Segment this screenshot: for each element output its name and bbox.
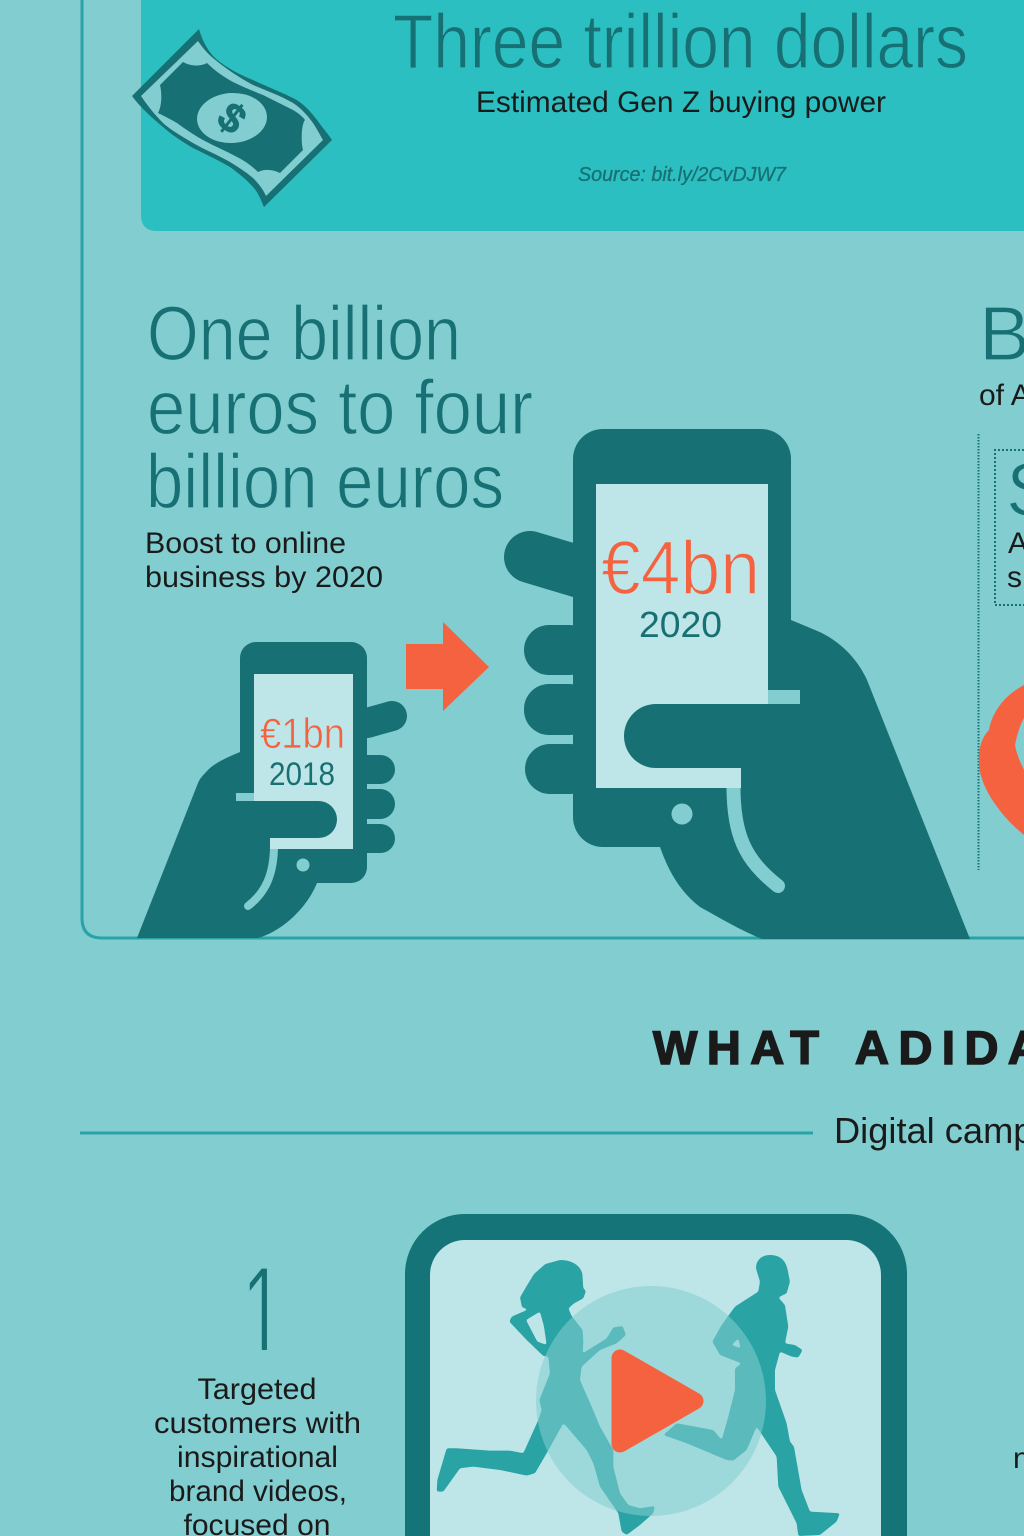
step 1: number and text: Targeted	[198, 1373, 316, 1406]
panel: clipped right column	[978, 291, 1024, 870]
play triangle	[620, 1358, 695, 1444]
heading: one billion euros to four billion euros	[146, 291, 533, 525]
heading: one billion euros to four billion euros: One billion	[147, 291, 461, 377]
text: boost to online business	[145, 527, 383, 594]
step 1: number and text: brand videos,	[169, 1475, 347, 1508]
step 1: number and text: inspirational	[177, 1441, 338, 1474]
arrow	[406, 622, 489, 711]
text: boost to online business: business by 2020	[145, 561, 383, 594]
play circle	[536, 1286, 766, 1516]
step 1: number and text	[155, 1268, 359, 1536]
label: 2020: 2020	[639, 604, 722, 645]
man runner	[663, 1255, 840, 1536]
label: 2018: 2018	[269, 756, 335, 792]
heading: one billion euros to four billion euros: euros to four	[147, 365, 533, 451]
heading: what adidas: WHAT	[653, 1021, 828, 1074]
icon: dollar bill: $	[209, 93, 255, 143]
panel: outlined frame	[82, 0, 1024, 938]
step 1: number and text: customers with	[154, 1407, 361, 1440]
label: €1bn: €1bn	[260, 710, 345, 758]
label: €4bn: €4bn	[601, 526, 760, 611]
woman runner	[437, 1260, 655, 1535]
text: estimated buying power: Estimated Gen Z buying power	[476, 86, 886, 119]
panel: clipped right column: s	[1007, 561, 1022, 594]
icon: dollar bill	[132, 29, 332, 207]
icon: small hand holding phone	[137, 642, 395, 938]
text: source: Source: bit.ly/2CvDJW7	[578, 164, 787, 186]
icon: video player with runners	[405, 1214, 907, 1536]
icon: large hand holding phone	[524, 429, 970, 939]
panel: three trillion dollars banner	[132, 0, 1024, 231]
step 1: number and text: 1	[242, 1237, 284, 1392]
heading: what adidas	[653, 1021, 1024, 1074]
heading: one billion euros to four billion euros: billion euros	[146, 439, 504, 525]
text: boost to online business: Boost to online	[145, 527, 346, 560]
icon: red shape	[979, 685, 1024, 835]
